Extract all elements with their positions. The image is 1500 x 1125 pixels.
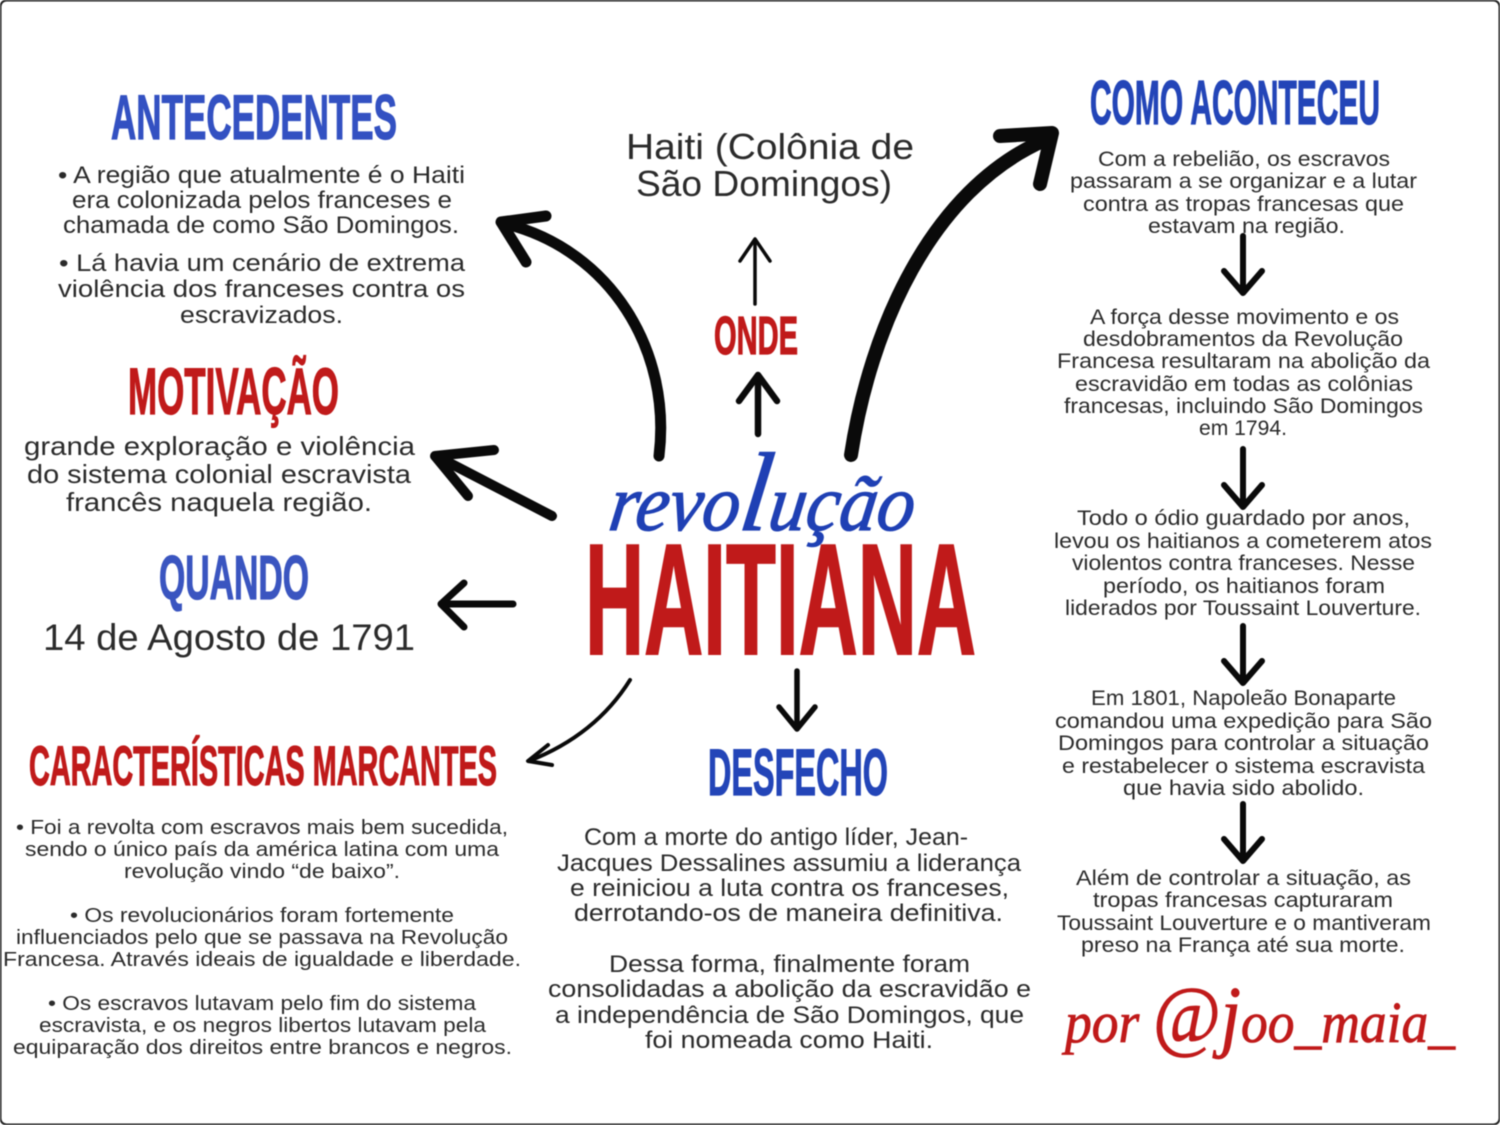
arrow: to características xyxy=(528,680,630,765)
text block: desfecho: derrotando-os de maneira definitiva. xyxy=(574,900,1003,927)
text block: antecedentes: • A região que atualmente é o Haiti xyxy=(58,162,465,189)
heading: antecedentes: ANTECEDENTES xyxy=(111,83,397,153)
text block: características: escravista, e os negros libertos lutavam pela xyxy=(39,1014,487,1037)
arrow: to como aconteceu xyxy=(851,133,1052,455)
text block: ódio: liderados por Toussaint Louverture. xyxy=(1065,596,1421,620)
arrow: to antecedentes xyxy=(501,216,661,456)
text block: antecedentes: chamada de como São Domingos. xyxy=(63,212,459,239)
text block: ódio xyxy=(1054,506,1432,620)
text: DESFECHO xyxy=(708,735,888,809)
heading: motivação: MOTIVAÇÃO xyxy=(128,354,339,428)
text block: características: • Os escravos lutavam pelo fim do sistema xyxy=(48,992,477,1015)
text block: desfecho: e reiniciou a luta contra os franceses, xyxy=(570,875,1009,902)
arrow: onde to haiti xyxy=(740,239,770,304)
text block: características: equiparação dos direitos entre brancos e negros. xyxy=(13,1036,512,1059)
arrow: abolição to ódio xyxy=(1224,449,1262,507)
text block: características: Francesa. Através ideais de igualdade e liberdade. xyxy=(3,948,521,971)
arrow: rebelião to abolição xyxy=(1224,236,1262,293)
text block: motivação: do sistema colonial escravista xyxy=(27,459,412,489)
text block: antecedentes: violência dos franceses contra os xyxy=(58,276,465,303)
text block: desfecho: Com a morte do antigo líder, Jean- xyxy=(584,824,968,851)
text block: características: revolução vindo “de baixo”. xyxy=(124,860,400,883)
text block: abolição: A força desse movimento e os xyxy=(1090,305,1399,329)
text block: rebelião: Com a rebelião, os escravos xyxy=(1098,147,1390,171)
text block: características xyxy=(3,816,521,1059)
title: revolução: revolução xyxy=(604,431,926,555)
text block: motivação xyxy=(24,431,416,517)
text block: captura: tropas francesas capturaram xyxy=(1093,888,1393,912)
arrow: napoleão to captura xyxy=(1224,804,1262,861)
text block: napoleão: Em 1801, Napoleão Bonaparte xyxy=(1091,686,1396,710)
text block: ódio: período, os haitianos foram xyxy=(1103,574,1385,598)
text block: napoleão xyxy=(1055,686,1432,800)
text block: motivação: francês naquela região. xyxy=(66,487,372,517)
title: haitiana: HAITIANA xyxy=(585,512,976,688)
text block: rebelião xyxy=(1070,147,1417,238)
text block: abolição: em 1794. xyxy=(1199,416,1287,440)
text block: captura xyxy=(1057,866,1431,957)
text block: desfecho: Jacques Dessalines assumiu a liderança xyxy=(557,850,1022,877)
text block: motivação: grande exploração e violência xyxy=(24,431,416,461)
text block: características: • Foi a revolta com escravos mais bem sucedida, xyxy=(16,816,508,839)
text block: abolição xyxy=(1057,305,1430,440)
arrow: to onde xyxy=(739,375,777,434)
arrow: to motivação xyxy=(435,450,552,516)
text: onde answer xyxy=(626,126,914,204)
text: date: 14 de Agosto de 1791 xyxy=(43,617,415,658)
text block: napoleão: e restabelecer o sistema escravista xyxy=(1062,754,1425,778)
arrow: ódio to napoleão xyxy=(1224,626,1262,683)
text block: rebelião: passaram a se organizar e a lutar xyxy=(1070,169,1417,193)
text block: abolição: escravidão em todas as colônias xyxy=(1075,372,1413,396)
text block: desfecho xyxy=(548,824,1031,1054)
text block: captura: preso na França até sua morte. xyxy=(1081,933,1405,957)
text block: desfecho: foi nomeada como Haiti. xyxy=(645,1027,933,1054)
text: onde answer: São Domingos) xyxy=(636,163,892,204)
heading: onde: ONDE xyxy=(714,306,798,366)
text block: antecedentes: • Lá havia um cenário de extrema xyxy=(59,250,466,277)
text block: características: influenciados pelo que se passava na Revolução xyxy=(16,926,508,949)
text block: napoleão: comandou uma expedição para São xyxy=(1055,709,1432,733)
text block: desfecho: a independência de São Domingos, que xyxy=(555,1002,1024,1029)
text block: rebelião: contra as tropas francesas que xyxy=(1083,192,1404,216)
text block: antecedentes xyxy=(58,162,466,329)
text block: antecedentes: era colonizada pelos franceses e xyxy=(72,187,452,214)
text block: ódio: Todo o ódio guardado por anos, xyxy=(1077,506,1410,530)
text block: captura: Além de controlar a situação, as xyxy=(1076,866,1411,890)
text: onde answer: Haiti (Colônia de xyxy=(626,126,914,167)
text block: napoleão: que havia sido abolido. xyxy=(1123,776,1364,800)
heading: quando: QUANDO xyxy=(159,544,309,613)
text block: desfecho: consolidadas a abolição da escravidão e xyxy=(548,976,1031,1003)
arrow: to desfecho xyxy=(779,671,815,729)
text block: rebelião: estavam na região. xyxy=(1148,214,1345,238)
text block: ódio: levou os haitianos a cometerem atos xyxy=(1054,529,1432,553)
text block: captura: Toussaint Louverture e o mantiveram xyxy=(1057,911,1431,935)
heading: características marcantes: CARACTERÍSTICAS MARCANTES xyxy=(29,734,497,797)
text block: napoleão: Domingos para controlar a situação xyxy=(1058,731,1429,755)
text block: abolição: desdobramentos da Revolução xyxy=(1083,327,1403,351)
signature: por @joo_maia_ xyxy=(1061,972,1456,1060)
text block: ódio: violentos contra franceses. Nesse xyxy=(1072,551,1415,575)
text block: antecedentes: escravizados. xyxy=(180,302,343,329)
arrow: to quando xyxy=(441,583,513,627)
text block: desfecho: Dessa forma, finalmente foram xyxy=(609,951,970,978)
text block: abolição: francesas, incluindo São Domingos xyxy=(1064,394,1423,418)
text block: características: • Os revolucionários foram fortemente xyxy=(70,904,454,927)
text block: características: sendo o único país da américa latina com uma xyxy=(25,838,500,861)
text block: abolição: Francesa resultaram na abolição da xyxy=(1057,349,1430,373)
